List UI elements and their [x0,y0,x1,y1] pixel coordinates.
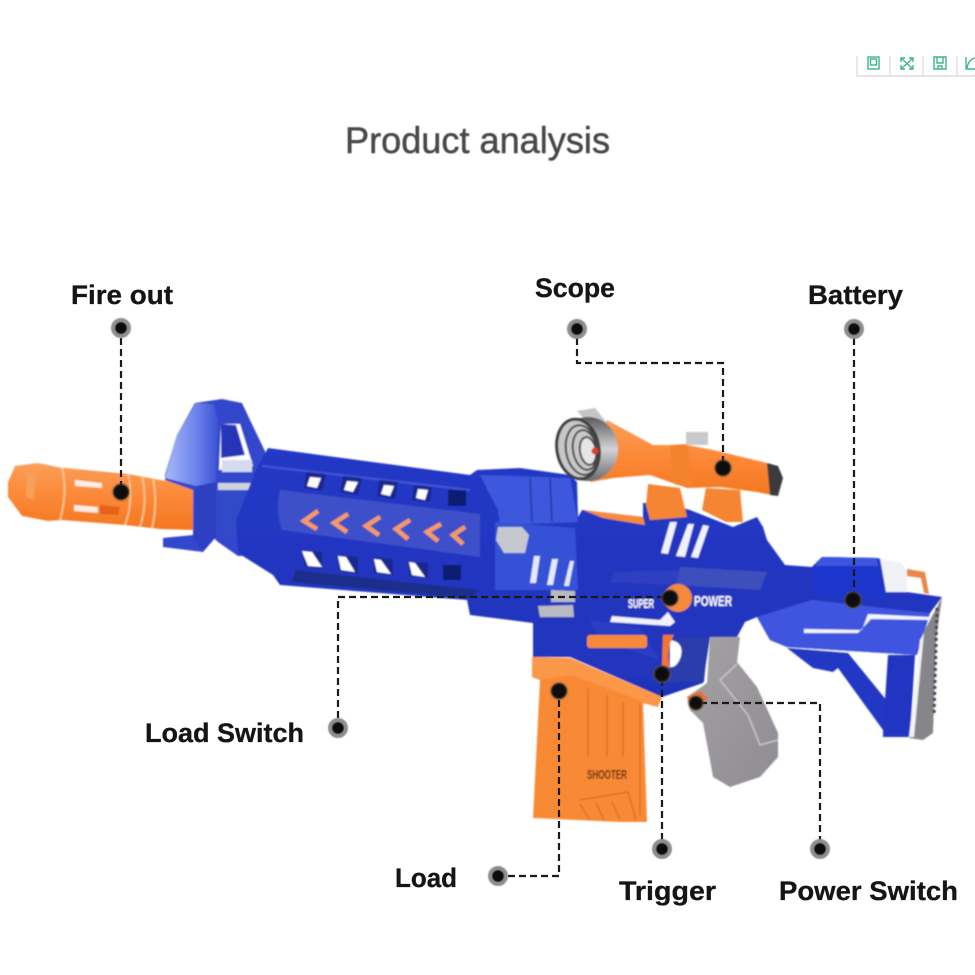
label: Battery: Battery [808,280,903,310]
toolbar icons [857,56,975,76]
main body: SUPER [628,596,654,611]
rear stock section [757,600,930,655]
title: Product analysis [345,120,610,161]
leader line: Power Switch [700,703,820,840]
main body [236,448,942,740]
leader line: Trigger [661,680,663,840]
handguard vents [304,472,432,502]
label: Fire out: Fire out [71,280,173,310]
stock butt plate [909,597,942,740]
orange strip and rail [583,510,645,525]
leader line: Load Switch [338,597,664,718]
leader line: Fire out [120,338,122,486]
label: Load: Load [395,863,457,893]
stock strut and post [787,648,905,735]
toy blaster product image [8,399,942,822]
power text: POWER [694,593,732,610]
label: Load Switch: Load Switch [145,718,304,748]
label: Scope: Scope [535,273,615,303]
pistol grip [687,637,778,787]
white stripes and trim [661,522,709,558]
label: Trigger: Trigger [619,876,717,906]
barrel and muzzle [8,463,195,530]
front sight ring [163,399,274,556]
scope [552,408,783,522]
chrome bolts [496,527,529,553]
magazine [532,657,662,822]
label dots [113,320,862,884]
orange chevrons [304,511,465,544]
trigger guard opening [668,638,708,682]
battery white band [880,558,907,592]
leader line: Load [508,697,559,876]
target dots on the blaster [113,460,861,710]
label: Power Switch: Power Switch [779,876,958,906]
magazine: SHOOTER [587,767,627,782]
leader line: Battery [853,338,855,596]
leader line: Scope [577,338,723,462]
